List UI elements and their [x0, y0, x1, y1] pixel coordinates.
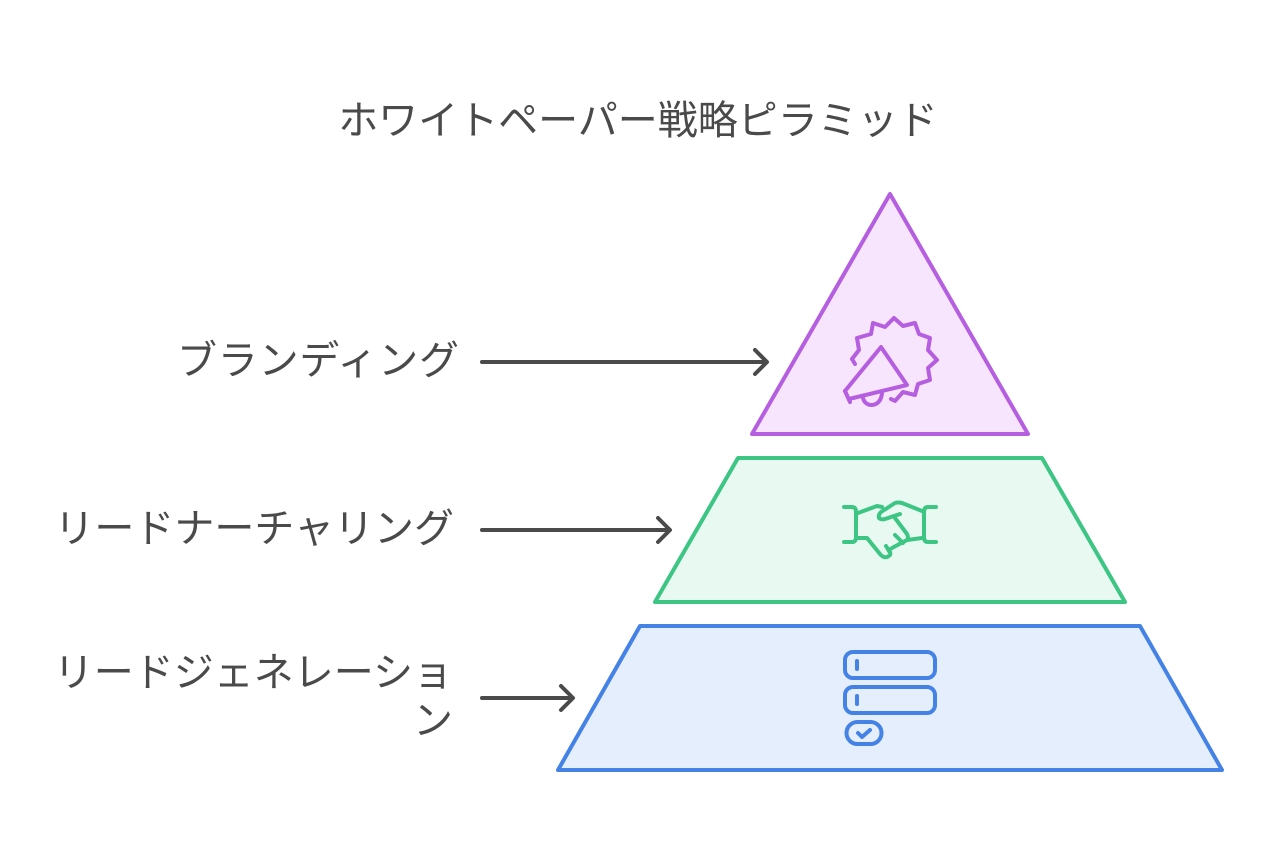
arrow: branding [482, 350, 767, 374]
label: lead generation: ン [413, 699, 453, 743]
trapezoid: lead nurturing [655, 458, 1125, 602]
panel: lead generation tier [558, 626, 1222, 770]
label: branding: ブランディング [177, 339, 459, 383]
arrow: lead generation [482, 686, 573, 710]
panel: branding tier [752, 194, 1028, 434]
icon: handshake [844, 502, 936, 557]
arrow: lead nurturing [482, 518, 670, 542]
icon: megaphone with badge [845, 318, 937, 405]
trapezoid: lead generation [558, 626, 1222, 770]
icon: form with checkbox [845, 652, 935, 744]
label: lead generation [54, 651, 453, 743]
label: lead generation: リードジェネレーショ [54, 651, 453, 695]
triangle: branding [752, 194, 1028, 434]
title: ホワイトペーパー戦略ピラミッド [338, 99, 938, 143]
label: lead nurturing: リードナーチャリング [54, 507, 454, 551]
panel: lead nurturing tier [655, 458, 1125, 602]
